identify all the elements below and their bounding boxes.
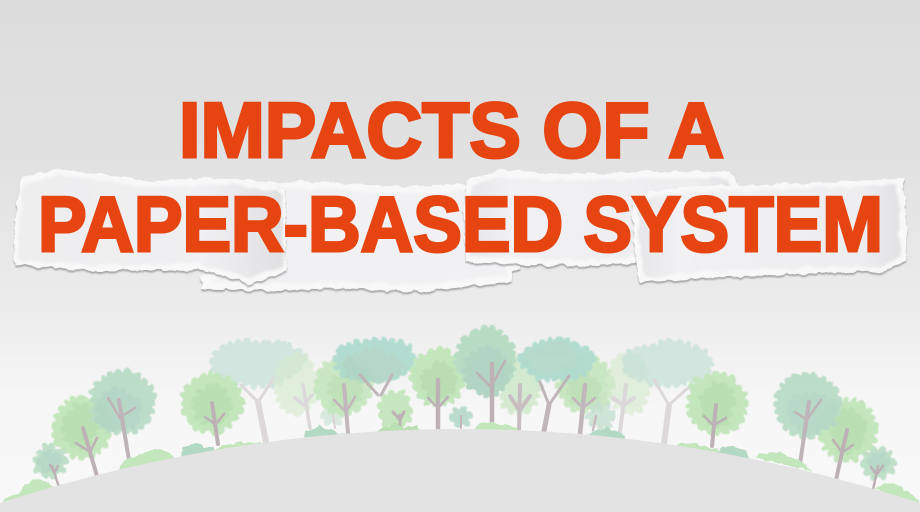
tree: teal left — [335, 340, 415, 395]
tree: green right of centre — [560, 358, 612, 434]
tree: pale green right of centre — [501, 360, 539, 430]
paper strip: right-centre — [464, 170, 737, 266]
tree: far right green — [818, 401, 876, 480]
tree: teal right — [522, 340, 592, 431]
forest — [0, 329, 920, 512]
tree: centre-left green — [316, 359, 370, 433]
tree: small teal centre — [452, 407, 470, 428]
paper strip: left — [14, 169, 286, 284]
tree: far right small — [864, 449, 894, 490]
paper strip: right — [632, 178, 907, 283]
tree: far left teal — [91, 371, 153, 460]
title line 1: IMPACTS OF A — [179, 86, 724, 174]
tree: green centre — [412, 350, 464, 428]
tree: pale left narrow — [276, 355, 316, 428]
tree: far left green — [54, 398, 110, 476]
tree: green right — [688, 375, 746, 446]
tree: pale small left — [323, 405, 341, 428]
tree: far right teal — [776, 374, 838, 464]
tree: teal centre — [458, 329, 514, 424]
hill — [0, 429, 920, 512]
tree: pale right wide — [626, 343, 712, 444]
paper strip: middle — [200, 181, 520, 292]
tree: pale left wide — [211, 341, 303, 442]
title line 2: PAPER-BASED SYSTEM — [38, 180, 883, 268]
tree: pale right narrow — [608, 355, 648, 431]
tree: green left — [183, 374, 241, 444]
tree: small pale right — [588, 404, 612, 430]
tree: small centre green — [380, 393, 410, 430]
shrubs — [0, 422, 920, 506]
tree: far left small — [35, 447, 65, 487]
torn paper strips — [14, 169, 907, 292]
